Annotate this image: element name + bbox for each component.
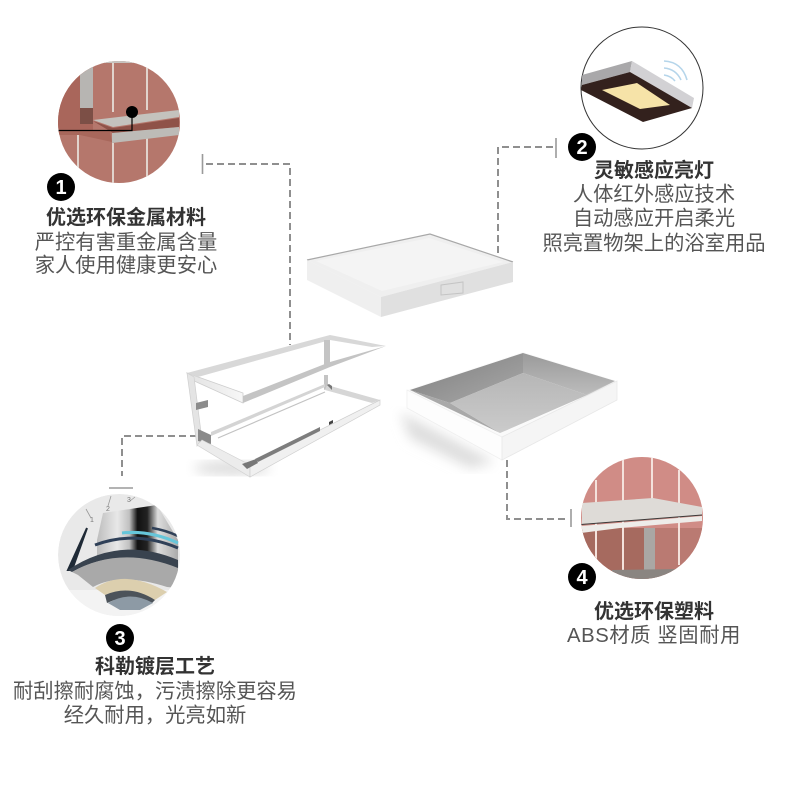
connector: material 1 to frame [202,154,290,345]
icon: sensor light circle [581,27,703,149]
icon: plating layers circle: 3 [127,497,131,504]
icon: material closeup circle [58,61,180,183]
connector: light 2 to cover [498,138,556,258]
badge 2 [568,133,596,161]
component: open tray [400,352,617,468]
text block: feature 4 [567,600,741,647]
text block: feature 4: ABS材质 竖固耐用 [567,624,741,647]
text block: feature 1: 家人使用健康更安心 [35,254,217,277]
icon: plating layers circle: 2 [106,506,110,513]
icon: plating layers circle [58,494,180,620]
top rail bands [187,373,243,403]
text block: feature 2: 照亮置物架上的浴室用品 [542,232,766,255]
text block: feature 3: 科勒镀层工艺 [95,655,215,678]
badge 3: 3 [114,628,126,650]
text block: feature 2: 灵敏感应亮灯 [594,158,714,182]
pointer line [58,118,133,132]
side upright [187,373,202,446]
badge 3 [106,624,134,652]
component: top cover [307,234,513,317]
text block: feature 2: 自动感应开启柔光 [573,207,735,230]
badge 4: 4 [576,567,588,589]
text block: feature 2: 人体红外感应技术 [573,183,735,206]
badge 2: 2 [576,137,588,159]
text block: feature 3: 耐刮擦耐腐蚀，污渍擦除更容易 [13,680,297,703]
text block: feature 2 [542,158,766,255]
badge 1: 1 [55,177,67,199]
icon: plating layers circle: 1 [90,517,94,524]
badge 4 [568,563,596,591]
text block: feature 1: 优选环保金属材料 [46,205,206,229]
text block: feature 1 [35,205,217,277]
text block: feature 3: 经久耐用，光亮如新 [64,704,246,727]
badge 1 [47,173,75,201]
connector: plating 3 to frame [109,436,197,488]
text block: feature 4: 优选环保塑料 [594,600,714,623]
text block: feature 3 [13,655,297,727]
icon: plastic shelf circle [581,457,703,580]
lower rail bands [197,440,250,477]
connector: plastic 4 to tray [507,460,571,527]
component: chrome frame [187,335,386,477]
text block: feature 1: 严控有害重金属含量 [35,231,217,254]
